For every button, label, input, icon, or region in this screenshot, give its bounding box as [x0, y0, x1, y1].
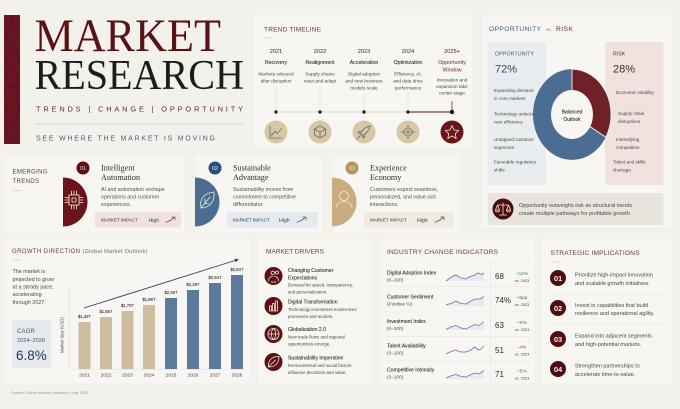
implication 4: accelerate time-to-value. — [575, 372, 636, 378]
bar chart: $2,54T — [208, 275, 222, 280]
milestone 2024: and data drive — [393, 78, 423, 84]
trend card 3: interactions. — [370, 202, 399, 208]
indicator row 1: 68 — [495, 272, 504, 281]
callout: cagr: 6.8% — [16, 348, 47, 363]
heading: opportunity vs risk: vs — [546, 28, 551, 33]
market impact bar: High — [417, 218, 428, 224]
growth description — [12, 269, 54, 306]
trend card 3: personalized, and value-rich — [370, 194, 436, 200]
driver 4 — [264, 353, 352, 375]
trend card 2: differentiator. — [233, 202, 264, 208]
opportunity column: Untapped customer — [494, 137, 535, 142]
opportunity column — [488, 42, 546, 185]
milestone 2025+ — [436, 49, 468, 96]
bar chart: 2022 — [101, 372, 112, 378]
indicator row 5: vs. 2023 — [515, 376, 529, 380]
driver 2: Technology investment modernizes — [288, 307, 357, 312]
badge 01: 01 — [80, 166, 86, 172]
market impact bar — [95, 212, 181, 228]
indicator row 3: vs. 2023 — [515, 327, 529, 332]
milestone 2022: reset and adapt — [304, 78, 337, 84]
driver 2: Digital Transformation — [288, 300, 338, 306]
driver 1: Demand for speed, transparency, — [288, 282, 353, 288]
heading: opportunity vs risk: OPPORTUNITY — [489, 26, 542, 33]
icon: chip — [63, 178, 88, 226]
milestone 2025+: expansion take — [436, 84, 468, 89]
decorative red bar — [4, 15, 20, 144]
indicator row 3: 63 — [495, 321, 504, 330]
milestone 2024 — [393, 49, 423, 90]
growth description: at a steady pace, — [12, 284, 54, 290]
risk column: Supply chain — [618, 111, 645, 116]
opportunity column: in core markets — [494, 96, 526, 101]
heading: growth direction — [12, 249, 148, 260]
indicator row 3 — [387, 319, 529, 332]
implication 4: 04 — [554, 365, 563, 374]
milestone 2025+: Innovation and — [437, 78, 468, 82]
driver 2: processes and models. — [288, 314, 333, 319]
panel: market drivers — [257, 238, 373, 384]
trend card 1: operations and customer — [101, 194, 160, 200]
implication 2: Invest in capabilities that build — [575, 303, 648, 309]
indicator row 2 — [387, 294, 529, 307]
risk column: Economic volatility — [616, 90, 654, 95]
milestone 2023: models scale — [350, 86, 378, 90]
icon: person — [332, 178, 356, 226]
tagline: SEE WHERE THE MARKET IS MOVING — [36, 136, 215, 142]
bar chart: $1,42T — [78, 314, 91, 319]
heading: opportunity vs risk — [489, 26, 574, 33]
opportunity column: new efficiency — [494, 120, 523, 124]
bar chart: 2028 — [232, 372, 243, 378]
risk column: Intensifying — [616, 137, 640, 142]
milestone 2025+: Window — [442, 68, 462, 74]
milestone 2025+: Opportunity — [438, 60, 466, 66]
panel: opportunity vs risk — [482, 14, 672, 228]
milestone 2024: Efficiency, AI, — [394, 72, 422, 76]
callout: cagr — [12, 320, 51, 368]
bar chart: 2024 — [144, 372, 155, 378]
implication 1: Prioritize high-impact innovation — [575, 272, 653, 278]
milestone 2023: Acceleration — [350, 60, 378, 66]
heading: emerging trends — [12, 170, 48, 190]
panel: trend timeline — [253, 14, 473, 148]
milestone 2021: after disruption — [260, 78, 292, 84]
panel: emerging trends — [4, 155, 460, 233]
milestone 2022: Supply chains — [305, 72, 335, 76]
driver 3: New trade flows and regional — [288, 334, 345, 340]
heading: emerging trends: EMERGING — [12, 170, 48, 176]
bar chart: $2,28T — [186, 282, 200, 287]
donut chart: Balanced — [562, 110, 583, 116]
title: research: RESEARCH — [34, 51, 244, 98]
market impact bar: High — [148, 218, 159, 224]
bar chart: $2,05T — [164, 290, 178, 295]
bar chart: $1,86T — [142, 297, 156, 302]
opportunity column: shifts — [494, 168, 505, 172]
opportunity column: Expanding demand — [494, 88, 534, 93]
indicator row 3: Investment Index — [387, 319, 426, 325]
milestone 2025+: 2025+ — [444, 49, 460, 55]
driver 4: Sustainability Imperative — [288, 356, 343, 362]
trend card 3: Customers expect seamless, — [370, 187, 438, 193]
milestone 2023: 2023 — [358, 49, 370, 55]
donut chart: Outlook — [563, 117, 581, 123]
milestone 2024: 2024 — [402, 49, 414, 55]
badge 03: 03 — [349, 166, 355, 172]
milestone 2021: Recovery — [265, 60, 287, 66]
indicator row 5: (0–100) — [387, 374, 404, 380]
driver 4: Environmental and social factors — [288, 363, 352, 368]
market impact bar: MARKET IMPACT — [370, 218, 407, 222]
indicator row 2: +6pp — [517, 295, 528, 301]
risk column: Talent and skills — [613, 160, 646, 164]
growth description: projected to grow — [12, 277, 54, 283]
bar chart: $1,70T — [121, 303, 134, 308]
bar chart: 2026 — [188, 372, 199, 378]
driver 2 — [264, 297, 357, 319]
driver 1: Changing Customer — [288, 268, 334, 274]
trend card 1: Intelligent — [101, 164, 135, 172]
risk column: RISK — [613, 52, 626, 58]
milestone 2023: and new business — [345, 78, 383, 84]
trend card 1 — [63, 162, 181, 228]
opportunity column: Technology unlocks — [494, 112, 535, 116]
opportunity column: 72% — [495, 64, 517, 76]
callout: create multiple pathways for profitable growth. — [519, 211, 632, 217]
indicator row 4: -4% — [518, 344, 527, 350]
indicator row 3: +9% — [517, 320, 528, 326]
implication 2 — [550, 300, 655, 317]
milestone 2023: Digital adoption — [348, 72, 381, 76]
milestone 2022: Realignment — [305, 60, 335, 66]
arrow: growth trend — [84, 259, 239, 308]
implication 1: and scalable growth initiatives. — [575, 281, 650, 287]
risk column: disruptions — [618, 119, 641, 124]
driver 1: and personalization. — [288, 290, 327, 294]
driver 1 — [264, 267, 353, 294]
subtitle: TRENDS | CHANGE | OPPORTUNITY — [36, 104, 243, 114]
milestone 2023 — [345, 49, 383, 90]
indicator row 2: 74% — [495, 296, 511, 305]
bar chart: Market Size (USD) — [60, 317, 64, 353]
source note: Source: Global Industry Analytics | May 2024 — [11, 390, 89, 395]
heading: strategic implications — [550, 250, 640, 262]
driver 3: Globalization 2.0 — [288, 327, 326, 333]
indicator row 5: +5% — [517, 368, 528, 374]
heading: trend timeline: TREND TIMELINE — [264, 26, 322, 34]
opportunity column: Favorable regulatory — [494, 160, 537, 164]
milestone 2024: Optimization — [394, 60, 423, 66]
panel: industry change indicators — [380, 238, 535, 384]
bar chart: 2023 — [122, 372, 133, 378]
indicator row 1: vs. 2023 — [515, 278, 529, 283]
milestone 2021 — [258, 49, 294, 84]
bar chart: $2,84T — [230, 267, 244, 272]
trend card 1: experiences. — [101, 202, 131, 208]
title: market: MARKET — [34, 9, 221, 61]
indicator row 4: Talent Availability — [387, 344, 426, 350]
heading: growth direction: (Global Market Outlook) — [82, 249, 148, 255]
trend card 2: Sustainability moves from — [233, 187, 294, 193]
milestone 2021: Markets rebound — [258, 72, 294, 76]
indicator row 1: +12% — [516, 271, 529, 277]
donut chart — [533, 69, 611, 160]
implication 1 — [550, 270, 653, 287]
heading: emerging trends: TRENDS — [12, 179, 39, 185]
panel: strategic implications — [541, 238, 672, 384]
implication 1: 01 — [554, 274, 562, 283]
trend card 3: Economy — [370, 173, 402, 182]
indicator row 5: Competitive Intensity — [387, 368, 435, 374]
risk column: shortage — [613, 168, 631, 172]
bar chart: $1,55T — [99, 309, 113, 314]
implication 2: 02 — [554, 304, 562, 313]
trend card 3 — [332, 155, 460, 233]
heading: strategic implications: STRATEGIC IMPLICATIONS — [550, 250, 640, 257]
indicator row 2: (Positive %) — [387, 302, 412, 306]
indicator row 1: Digital Adoption Index — [387, 270, 437, 276]
bar chart: 2025 — [166, 372, 177, 378]
trend card 2: commitment to competitive — [233, 194, 296, 200]
driver 3: opportunities emerge. — [288, 342, 330, 346]
indicator row 4: (0–100) — [387, 350, 404, 356]
indicator row 1: (0–100) — [387, 278, 404, 282]
icon: box — [308, 120, 332, 144]
panel: growth direction — [4, 238, 250, 384]
growth description: through 2027. — [12, 300, 46, 306]
implication 2: resilience and operational agility. — [575, 311, 655, 317]
risk column: 28% — [613, 64, 635, 76]
growth description: accelerating — [12, 292, 42, 298]
icon: chart — [264, 120, 288, 144]
callout: Opportunity outweighs risk as structural trends — [519, 203, 632, 209]
opportunity column: segments — [494, 145, 515, 150]
heading: growth direction: GROWTH DIRECTION — [12, 249, 80, 255]
indicator row 1 — [387, 270, 529, 283]
market impact bar — [227, 212, 318, 228]
implication 3 — [550, 331, 652, 348]
indicator row 5: 71 — [495, 370, 504, 379]
indicator row 4: vs. 2023 — [515, 352, 529, 356]
milestone 2021: 2021 — [270, 49, 282, 55]
growth description: The market is — [12, 269, 45, 275]
bar chart — [60, 267, 244, 378]
implication 3: and high-potential markets. — [575, 342, 642, 348]
market impact bar: High — [279, 218, 290, 224]
indicator row 2: vs. 2023 — [515, 302, 529, 307]
trend card 2: Advantage — [233, 173, 269, 182]
implication 4: Strengthen partnerships to — [575, 364, 640, 370]
milestone 2022: 2022 — [314, 49, 326, 55]
indicator row 3: (0–100) — [387, 326, 404, 331]
timeline axis — [274, 86, 454, 114]
title block — [4, 9, 244, 144]
milestone 2024: performance — [395, 86, 422, 90]
callout: cagr: 2024–2028 — [17, 338, 45, 344]
icon: leaf — [195, 178, 220, 226]
badge 02: 02 — [212, 166, 218, 172]
trend card 3: Experience — [370, 164, 407, 172]
risk column: competition — [616, 145, 640, 150]
bar chart: 2027 — [210, 372, 221, 378]
callout: cagr: CAGR — [17, 328, 35, 335]
milestone 2022 — [304, 49, 337, 84]
market impact bar: MARKET IMPACT — [233, 218, 270, 222]
implication 4 — [550, 361, 640, 378]
heading: industry change indicators: INDUSTRY CHANGE INDICATORS — [387, 249, 499, 256]
callout — [488, 193, 664, 225]
heading: opportunity vs risk: RISK — [556, 26, 574, 33]
icon: scales — [492, 198, 514, 220]
trend card 1: AI and automation reshape — [101, 187, 165, 193]
icon: target — [396, 120, 420, 144]
risk column — [605, 42, 664, 185]
milestone 2025+: center stage — [439, 90, 465, 96]
driver 4: influence decisions and value. — [288, 370, 347, 375]
trend card 1: Automation — [101, 173, 140, 182]
implication 3: 03 — [554, 335, 562, 344]
icon: rocket — [352, 120, 376, 144]
driver 1: Expectations — [288, 276, 318, 282]
indicator row 2: Customer Sentiment — [387, 294, 434, 300]
indicator row 5 — [387, 368, 529, 380]
driver 3 — [264, 325, 345, 346]
indicator row 4: 51 — [495, 346, 504, 355]
trend card 2 — [195, 155, 322, 233]
indicator row 4 — [387, 344, 529, 356]
bar chart: 2021 — [79, 372, 90, 378]
icon: star — [440, 120, 464, 144]
market impact bar: MARKET IMPACT — [101, 218, 138, 222]
trend card 2: Sustainable — [233, 164, 271, 172]
heading: market drivers: MARKET DRIVERS — [266, 248, 325, 256]
market impact bar — [364, 212, 454, 228]
implication 3: Expand into adjacent segments — [575, 334, 652, 340]
opportunity column: OPPORTUNITY — [495, 52, 535, 58]
